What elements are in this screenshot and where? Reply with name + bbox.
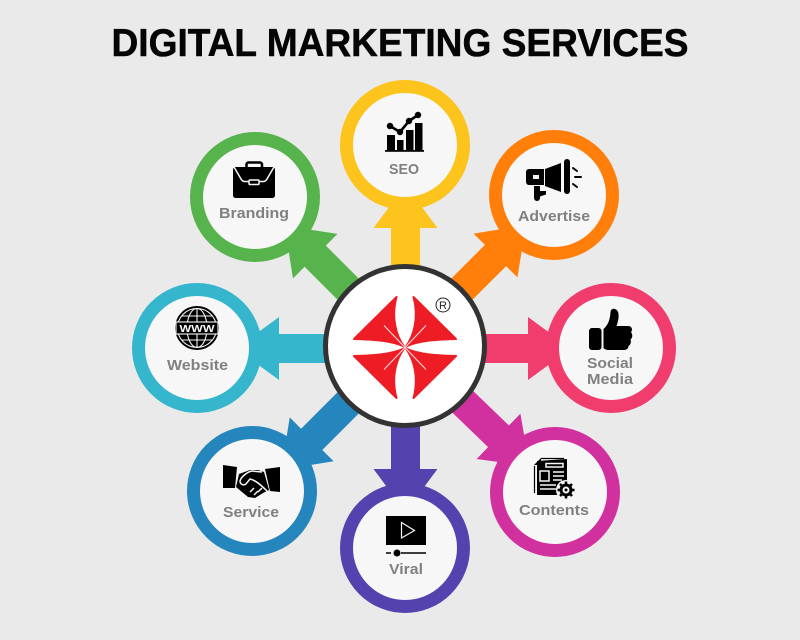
label: Social Media: Media (587, 371, 634, 388)
ring: Advertise (496, 136, 612, 254)
icon: handshake (223, 465, 280, 498)
arrow: Service (259, 367, 384, 492)
ring: Viral (346, 490, 464, 606)
ring: Contents (496, 434, 614, 550)
arrow: Branding (263, 204, 385, 326)
arrow: Website (236, 317, 345, 380)
arrow: SEO (374, 185, 438, 286)
central logo (326, 266, 484, 426)
icon: globe (175, 306, 219, 350)
icon: document with gear (534, 458, 576, 500)
label: Service: Service (223, 504, 279, 521)
title: DIGITAL MARKETING SERVICES (112, 22, 688, 65)
panel: Social Media (465, 290, 670, 406)
label: Social Media (587, 355, 634, 388)
ring: Website (138, 290, 256, 406)
label: SEO: SEO (389, 161, 419, 178)
panel: Contents (426, 365, 614, 550)
label: Branding: Branding (219, 205, 289, 222)
label: Social Media: Social (587, 355, 633, 372)
arrow: Viral (374, 406, 438, 512)
icon: thumbs up (589, 309, 632, 350)
icon: bar chart (385, 112, 424, 152)
arrow: Contents (426, 365, 551, 489)
panel: Advertise (426, 136, 612, 325)
panel: Branding (196, 138, 385, 326)
panel: SEO (346, 86, 464, 286)
arrow: Advertise (426, 203, 548, 325)
ring: Social Media (552, 290, 670, 406)
icon: briefcase (233, 162, 275, 198)
registered mark (436, 298, 450, 312)
ring: Branding (196, 138, 314, 256)
logo mark (354, 297, 456, 398)
panel: Service (194, 367, 384, 550)
label: Website: Website (167, 357, 228, 374)
label: Contents: Contents (519, 502, 589, 519)
icon: video player (386, 516, 426, 556)
icon: megaphone (526, 159, 581, 201)
panel: Website (138, 290, 345, 406)
ring: Service (194, 432, 310, 550)
label: Viral: Viral (389, 561, 423, 578)
arrow: Social Media (465, 317, 571, 380)
label: Advertise: Advertise (518, 208, 590, 225)
registered mark: R (439, 300, 447, 312)
ring: SEO (346, 86, 464, 204)
panel: Viral (346, 406, 464, 606)
icon: globe: WWW (180, 323, 215, 335)
hub circle (326, 266, 484, 426)
